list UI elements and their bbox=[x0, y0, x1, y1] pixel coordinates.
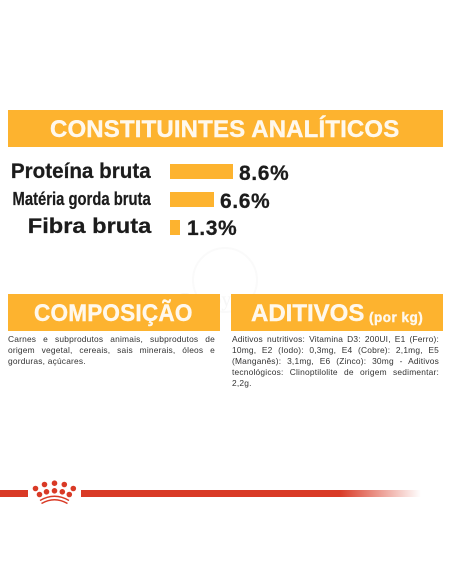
value: 6.6%: 6.6% bbox=[220, 190, 270, 213]
value: 8.6%: 8.6% bbox=[239, 162, 289, 185]
bar: fibra bbox=[170, 220, 180, 235]
value: 1.3%: 1.3% bbox=[187, 217, 237, 240]
chart: analytical constituents bbox=[11, 159, 289, 240]
heading band: composição bbox=[8, 294, 220, 331]
heading band: constituintes analíticos bbox=[8, 110, 443, 147]
text: composição: Carnes e subprodutos animais, subprodutos de origem vegetal, cereais, sais minerais, óleos e gorduras, açúcares. bbox=[8, 334, 215, 366]
label: fibra bruta: Fibra bruta bbox=[27, 214, 151, 238]
heading text: ADITIVOS bbox=[251, 300, 364, 327]
footer stripe left bbox=[0, 490, 28, 497]
label: matéria gorda bruta: Matéria gorda bruta bbox=[13, 188, 151, 209]
bar: proteína bbox=[170, 164, 233, 179]
icon: royal canin crown bbox=[32, 480, 76, 504]
panel: aditivos bbox=[231, 294, 443, 388]
watermark: Puppy care bbox=[180, 289, 270, 311]
heading text: COMPOSIÇÃO bbox=[34, 300, 193, 327]
footer stripe right bbox=[81, 490, 421, 497]
heading band: aditivos bbox=[231, 294, 443, 331]
text: aditivos: Aditivos nutritivos: Vitamina D3: 200UI, E1 (Ferro): 10mg, E2 (Iodo): 0,3mg, E4 (Cobre): 2,1mg, E5 (Manganês): 3,1mg, E6 (Zinco): 30mg - Aditivos tecnológicos: Clinoptilolite de origem sedimentar: 2,2g. bbox=[232, 334, 439, 388]
label: proteína bruta: Proteína bruta bbox=[11, 159, 151, 183]
panel: composição bbox=[8, 294, 220, 366]
bar: matéria gorda bbox=[170, 192, 214, 207]
heading text: CONSTITUINTES ANALÍTICOS bbox=[50, 116, 399, 143]
heading unit text: (por kg) bbox=[369, 310, 423, 325]
